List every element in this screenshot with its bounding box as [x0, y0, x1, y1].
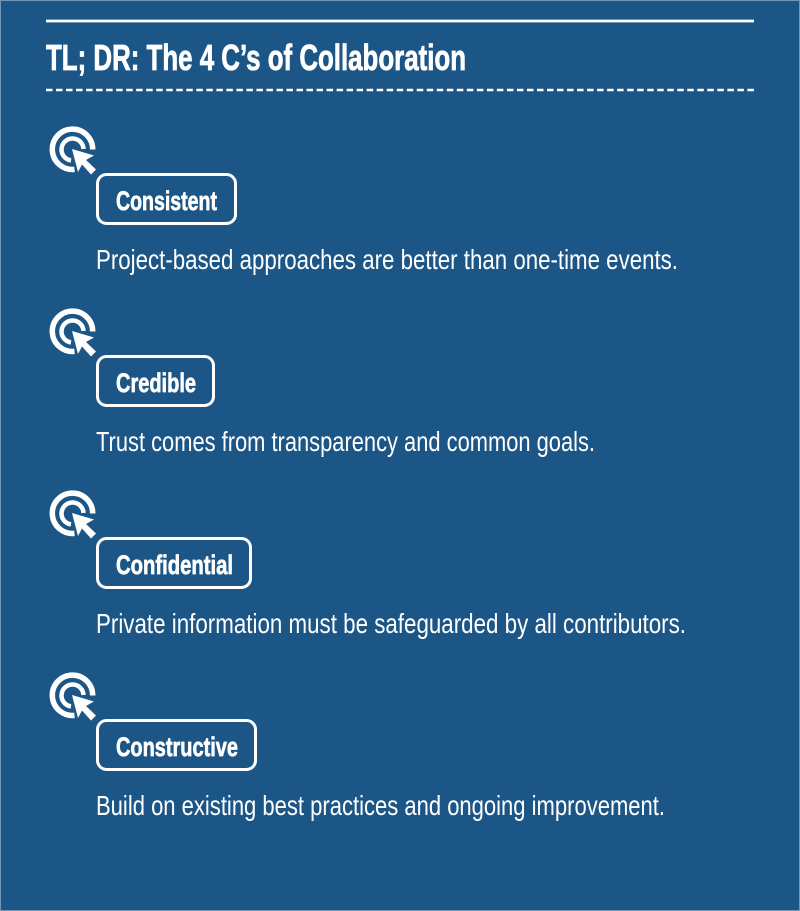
item: Confidential: [52, 493, 686, 639]
text: Constructive description: Build on existing best practices and ongoing improvement.: [96, 790, 665, 821]
item: Credible: [52, 311, 595, 457]
text: Credible description: Trust comes from transparency and common goals.: [96, 426, 595, 457]
item: Constructive: [52, 675, 665, 821]
label: Credible: [98, 356, 214, 406]
icon: click target: [52, 311, 96, 356]
label: Credible: Credible: [116, 368, 196, 398]
label: Constructive: [98, 720, 256, 770]
title: TL; DR: The 4 C’s of Collaboration: [46, 37, 466, 78]
icon: click target: [52, 493, 96, 538]
icon: click target: [52, 129, 96, 174]
label: Constructive: Constructive: [116, 732, 238, 762]
label: Confidential: [98, 538, 250, 588]
item: Consistent: [52, 129, 678, 275]
label: Confidential: Confidential: [116, 550, 233, 580]
icon: click target: [52, 675, 96, 720]
label: Consistent: Consistent: [116, 186, 217, 216]
label: Consistent: [98, 174, 236, 224]
